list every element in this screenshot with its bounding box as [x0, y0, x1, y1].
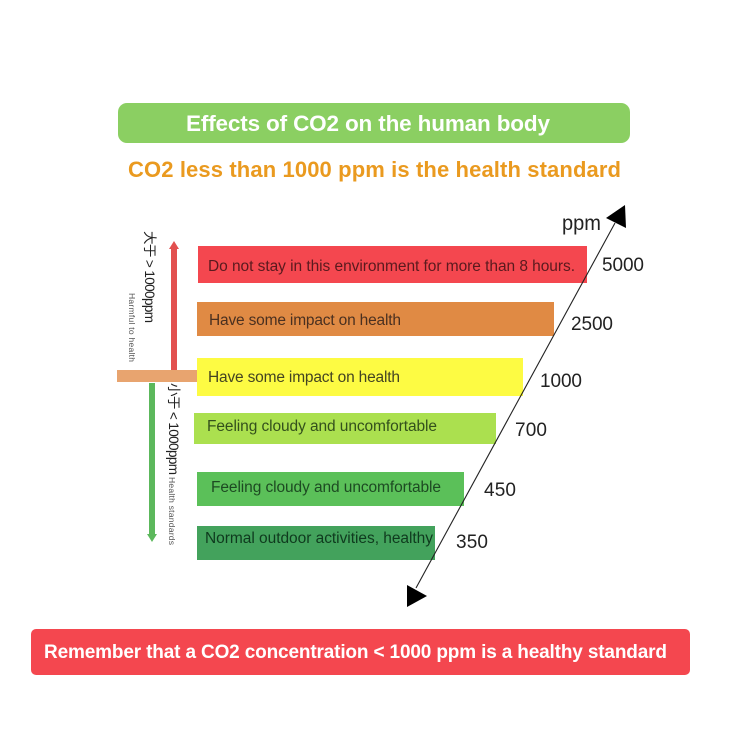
label: harmful to health: Harmful to health: [127, 293, 137, 362]
title banner: Effects of CO2 on the human body: [186, 111, 550, 136]
bar: 450 ppm: Feeling cloudy and uncomfortable: [211, 479, 441, 496]
bar: 2500 ppm: [197, 302, 554, 336]
axis unit: ppm: [562, 212, 601, 235]
ppm axis arrow: [407, 205, 626, 607]
level bars: [194, 246, 587, 560]
label: health standards: Health standards: [167, 477, 177, 545]
bar: 5000 ppm: Do not stay in this environment for more than 8 hours.: [208, 258, 575, 275]
value 2500: 2500: [571, 314, 613, 335]
title banner: [118, 103, 630, 143]
value 350: 350: [456, 532, 488, 553]
bar: 700 ppm: [194, 413, 496, 444]
value 450: 450: [484, 480, 516, 501]
bar: 700 ppm: Feeling cloudy and uncomfortable: [207, 418, 437, 435]
label: less than 1000 ppm: 小于 < 1000ppm: [166, 383, 181, 475]
bar: 1000 ppm: [197, 358, 523, 396]
value 5000: 5000: [602, 255, 644, 276]
axis labels: [456, 212, 644, 553]
bar: 350 ppm: [197, 526, 435, 560]
bar: 1000 ppm: Have some impact on health: [208, 369, 400, 386]
subtitle: CO2 less than 1000 ppm is the health standard: [128, 157, 621, 182]
bar: 2500 ppm: Have some impact on health: [209, 312, 401, 329]
bar: 5000 ppm: [198, 246, 587, 283]
bar: 450 ppm: [197, 472, 464, 506]
label: greater than 1000 ppm: 大于 > 1000ppm: [142, 231, 157, 323]
bar: 350 ppm: Normal outdoor activities, healthy: [205, 530, 433, 547]
divider bar at 1000 ppm: [117, 370, 197, 382]
red up arrow: [169, 241, 179, 370]
reminder banner: Remember that a CO2 concentration < 1000 ppm is a healthy standard: [44, 642, 667, 663]
green down arrow: [147, 383, 157, 542]
value 1000: 1000: [540, 371, 582, 392]
value 700: 700: [515, 420, 547, 441]
reminder banner: [31, 629, 690, 675]
